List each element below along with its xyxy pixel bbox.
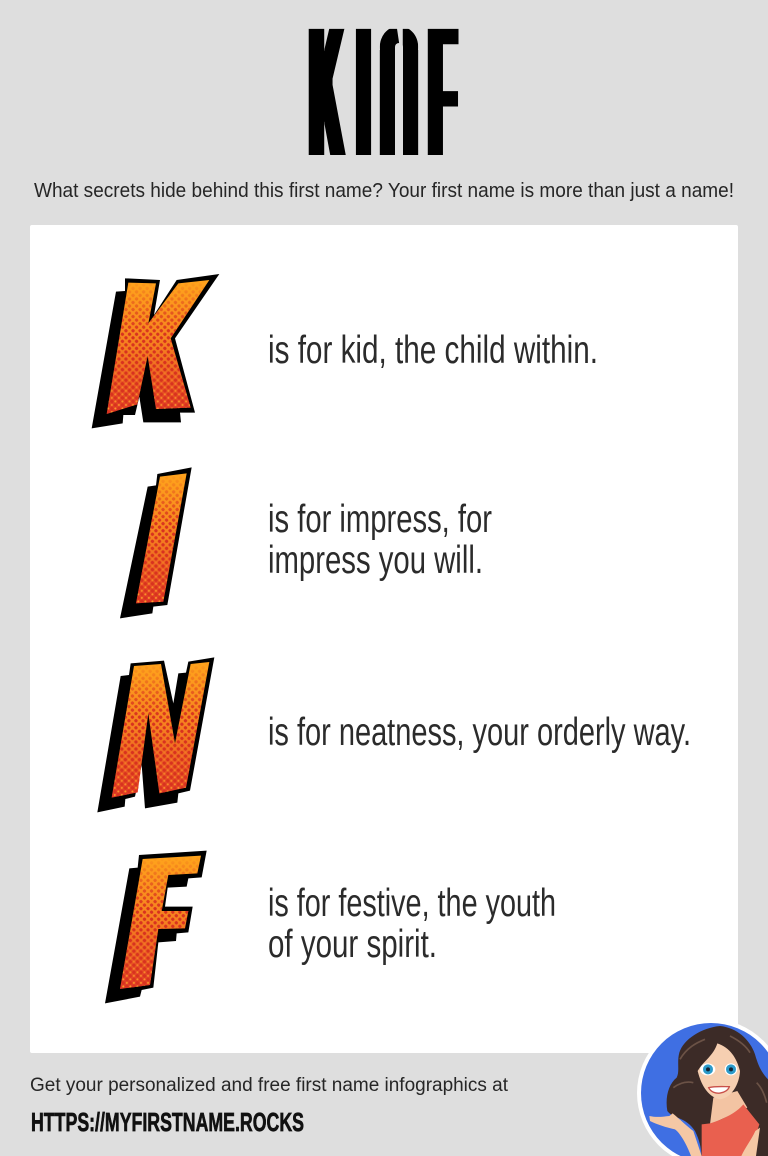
text: F lines <box>268 882 556 966</box>
icon: avatar <box>637 1019 768 1156</box>
footer text: Get your personalized and free first name infographics at <box>30 1075 509 1096</box>
icon: letter I <box>120 467 192 618</box>
text: K line: is for kid, the child within. <box>268 329 598 372</box>
footer url: HTTPS://MYFIRSTNAME.ROCKS <box>31 1107 304 1137</box>
subtitle: What secrets hide behind this first name? Your first name is more than just a name! <box>34 180 734 202</box>
icon: letter F <box>105 851 207 1003</box>
text: F lines: is for festive, the youth <box>268 882 556 925</box>
text: I lines: impress you will. <box>268 539 483 582</box>
text: I lines <box>268 498 492 582</box>
title <box>310 0 456 199</box>
text: F lines: of your spirit. <box>268 923 437 966</box>
icon: letter N <box>97 657 214 812</box>
icon: letter K <box>92 274 219 428</box>
panel: letters card <box>30 225 738 1053</box>
text: I lines: is for impress, for <box>268 498 492 541</box>
